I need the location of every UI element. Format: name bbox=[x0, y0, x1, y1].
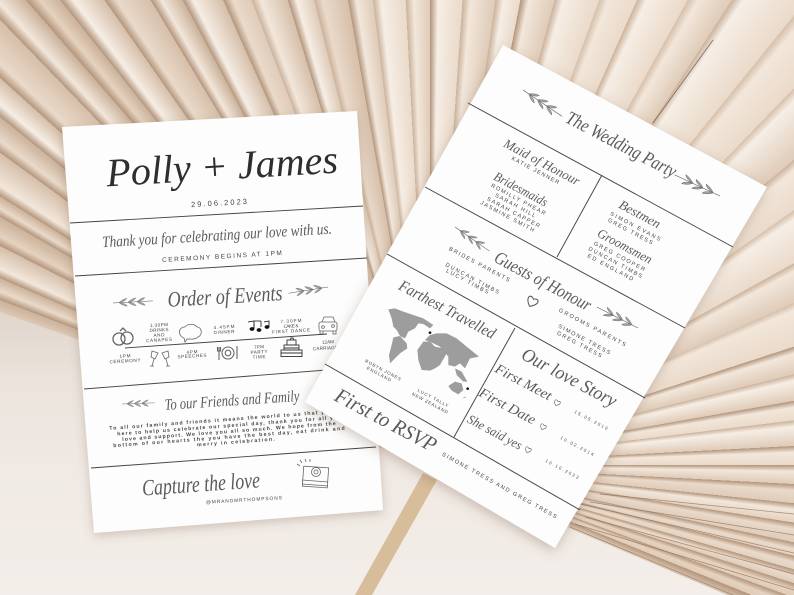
icon: car bbox=[319, 317, 337, 334]
milestone: first date bbox=[475, 385, 595, 457]
bridesmaids heading: Bridesmaids bbox=[491, 169, 551, 209]
bridesmaid names: SARAH CAPPER bbox=[486, 197, 540, 229]
cake and first dance time: 7.30PM bbox=[280, 318, 302, 324]
panel: maid of honour and bridesmaids bbox=[479, 135, 583, 234]
drinks time: AND bbox=[153, 332, 165, 338]
milestone: she said yes: She said yes bbox=[465, 411, 525, 453]
milestone: first date: First Date bbox=[475, 385, 538, 428]
heading: Guests of Honour: Guests of Honour bbox=[491, 247, 596, 315]
panel: our love story bbox=[465, 344, 621, 480]
milestone: she said yes: 10.10.2023 bbox=[544, 458, 580, 480]
groomsmen names: ED ENGLAND bbox=[586, 253, 634, 283]
bridesmaid names: SARAH HILL bbox=[494, 193, 536, 219]
right card: The Wedding Party bbox=[305, 45, 767, 548]
RSVP names: SIMONE TRESS AND GREG TRESS bbox=[441, 452, 558, 520]
brides parents: DUNCAN TIMBS bbox=[444, 262, 500, 296]
card background bbox=[305, 45, 767, 548]
cake and first dance time bbox=[272, 318, 310, 335]
cake and first dance time: FIRST DANCE bbox=[272, 327, 310, 335]
map label: Lucy Tally: LUCY TALLY bbox=[417, 388, 449, 408]
carriages label: 12AM bbox=[322, 339, 334, 345]
grooms parents: GROOMS PARENTS bbox=[557, 308, 627, 348]
message paragraph: merry in celebration. bbox=[197, 437, 276, 448]
cake and first dance time: CAKE & bbox=[283, 323, 299, 329]
drinks time: CANAPES bbox=[146, 337, 172, 343]
message paragraph bbox=[109, 408, 347, 449]
card title: names: Polly + James bbox=[104, 137, 339, 195]
bestmen heading: Bestmen bbox=[617, 197, 663, 231]
sprig: arrow before friends heading bbox=[122, 400, 155, 407]
bridesmaid names bbox=[479, 183, 546, 234]
message paragraph: love and support. We love you all so much. We hope from the bbox=[122, 421, 336, 443]
ceremony label: CEREMONY bbox=[109, 358, 141, 364]
dinner time bbox=[213, 324, 235, 335]
world map bbox=[388, 308, 479, 398]
map label: Robyn Jones: ROBYN JONES bbox=[364, 358, 402, 382]
fan stem bbox=[355, 473, 437, 595]
icon: speech cloud bbox=[179, 324, 201, 342]
sprig right bbox=[595, 303, 640, 332]
party label bbox=[250, 344, 268, 360]
panel: first to RSVP bbox=[330, 383, 558, 520]
message paragraph: bottom of our hearts the you have the best day, eat drink and bbox=[113, 426, 345, 449]
sprig right of heading bbox=[288, 283, 329, 297]
drinks time: DRINKS bbox=[149, 327, 169, 333]
carriages label: CARRIAGES bbox=[313, 345, 341, 351]
icon: wedding cake bbox=[281, 338, 302, 356]
brides parents: LUCY TIMBS bbox=[445, 268, 489, 296]
left card: Polly + James programme bbox=[62, 111, 383, 533]
card background bbox=[62, 111, 383, 533]
map label: Robyn Jones: ENGLAND bbox=[366, 365, 392, 383]
bridesmaid names: JASMINE SMITH bbox=[479, 200, 535, 234]
panel: bestmen and groomsmen bbox=[586, 197, 663, 283]
ceremony label bbox=[109, 353, 141, 364]
drinks time bbox=[146, 322, 172, 343]
dinner time: DINNER bbox=[213, 329, 235, 335]
speeches label bbox=[177, 349, 207, 359]
milestone: first date: 10.02.2014 bbox=[559, 435, 595, 457]
map label: Lucy Tally: NEW ZEALAND bbox=[411, 391, 449, 415]
heading: First to RSVP: First to RSVP bbox=[330, 383, 441, 457]
message paragraph: To all our family and friends it means the world to us that you are bbox=[109, 408, 347, 432]
grooms parents: GREG TRESS bbox=[556, 331, 603, 360]
party label: TIME bbox=[252, 354, 266, 360]
icon: music notes bbox=[248, 321, 269, 332]
icon: instant camera bbox=[297, 459, 329, 488]
heading: Farthest Travelled: Farthest Travelled bbox=[395, 277, 499, 343]
milestone: first meet: 15.05.2010 bbox=[573, 409, 609, 431]
sprig top right bbox=[673, 170, 722, 201]
speeches label: SPEECHES bbox=[177, 353, 207, 359]
sprig left of heading bbox=[113, 297, 153, 307]
bestmen names: GREG TRESS bbox=[607, 218, 654, 247]
heading: To our Friends and Family: To our Friends and Family bbox=[164, 388, 301, 414]
milestone: first meet bbox=[491, 361, 609, 431]
heading: Our love Story: Our love Story bbox=[518, 344, 621, 412]
bridesmaid names: ROMILLY PHEAR bbox=[490, 183, 546, 217]
ceremony label: 1PM bbox=[119, 353, 131, 359]
hashtag: @MRANDMRTHOMPSONS bbox=[206, 495, 282, 506]
message paragraph: here to help us celebrate our special day, thank you for all your bbox=[117, 414, 345, 438]
ceremony time: CEREMONY BEGINS AT 1PM bbox=[162, 250, 282, 264]
icon: plate and cutlery bbox=[218, 346, 237, 360]
date: 29.06.2023 bbox=[191, 197, 247, 209]
heading: The Wedding Party: The Wedding Party bbox=[562, 108, 680, 183]
icon: champagne glasses bbox=[150, 351, 170, 366]
thank-you message: Thank you for celebrating our love with us. bbox=[102, 221, 332, 251]
order of events timeline bbox=[109, 317, 341, 366]
milestone: she said yes bbox=[465, 411, 580, 480]
sprig left bbox=[453, 224, 492, 255]
timeline rule bbox=[125, 334, 327, 348]
sprig top left bbox=[520, 86, 565, 120]
maid of honour name: KATIE JENNER bbox=[510, 156, 560, 186]
maid of honour heading: Maid of Honour bbox=[501, 135, 583, 189]
party label: PARTY bbox=[250, 349, 268, 355]
bestmen names: SIMON EVANS bbox=[609, 211, 661, 243]
panel: farthest travelled bbox=[364, 277, 499, 415]
brides parents: BRIDES PARENTS bbox=[448, 246, 511, 284]
carriages label bbox=[313, 339, 341, 351]
milestone: first meet: First Meet bbox=[491, 361, 555, 405]
groomsmen heading: Groomsmen bbox=[595, 225, 655, 267]
speeches label: 4PM bbox=[186, 349, 198, 355]
heading: Capture the love: Capture the love bbox=[141, 467, 261, 501]
icon: heart bbox=[525, 295, 539, 309]
grooms parents: SIMONE TRESS bbox=[557, 324, 611, 356]
heading: Order of Events: Order of Events bbox=[167, 280, 283, 312]
panel: guests of honour bbox=[444, 224, 640, 360]
groomsmen names: DUNCAN TIMBS bbox=[587, 246, 643, 280]
icon: rings bbox=[113, 328, 133, 345]
drinks time: 1.30PM bbox=[150, 322, 168, 328]
dinner time: 4.45PM bbox=[213, 324, 235, 330]
groomsmen names: GREG COOPER bbox=[592, 241, 646, 273]
party label: 7PM bbox=[254, 344, 264, 350]
